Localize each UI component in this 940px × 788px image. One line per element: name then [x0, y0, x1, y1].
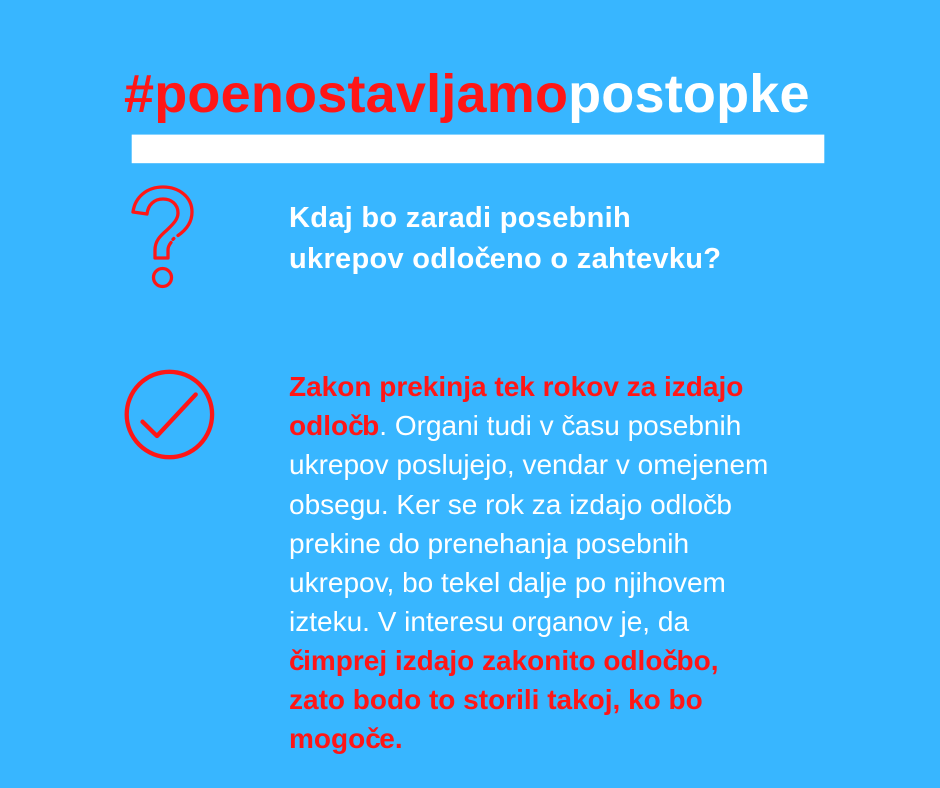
title: #poenostavljamopostopke [124, 64, 810, 124]
question text [289, 202, 721, 275]
answer text: prekine do prenehanja posebnih [289, 528, 689, 559]
answer text: mogoče. [289, 723, 403, 754]
answer text: zato bodo to storili takoj, ko bo [289, 684, 703, 715]
icon: check mark in circle [124, 370, 214, 460]
question text: ukrepov odločeno o zahtevku? [289, 243, 721, 275]
answer text: Zakon prekinja tek rokov za izdajo [289, 371, 743, 402]
answer text: odločb. Organi tudi v času posebnih [289, 410, 741, 441]
answer text: izteku. V interesu organov je, da [289, 606, 689, 637]
answer text: ukrepov poslujejo, vendar v omejenem [289, 449, 768, 480]
answer text: čimprej izdajo zakonito odločbo, [289, 645, 719, 676]
answer text: obsegu. Ker se rok za izdajo odločb [289, 489, 732, 520]
white title bar [132, 134, 824, 164]
answer text: ukrepov, bo tekel dalje po njihovem [289, 567, 726, 598]
answer text [289, 371, 768, 754]
question text: Kdaj bo zaradi posebnih [289, 202, 631, 234]
icon: question mark [131, 185, 194, 288]
